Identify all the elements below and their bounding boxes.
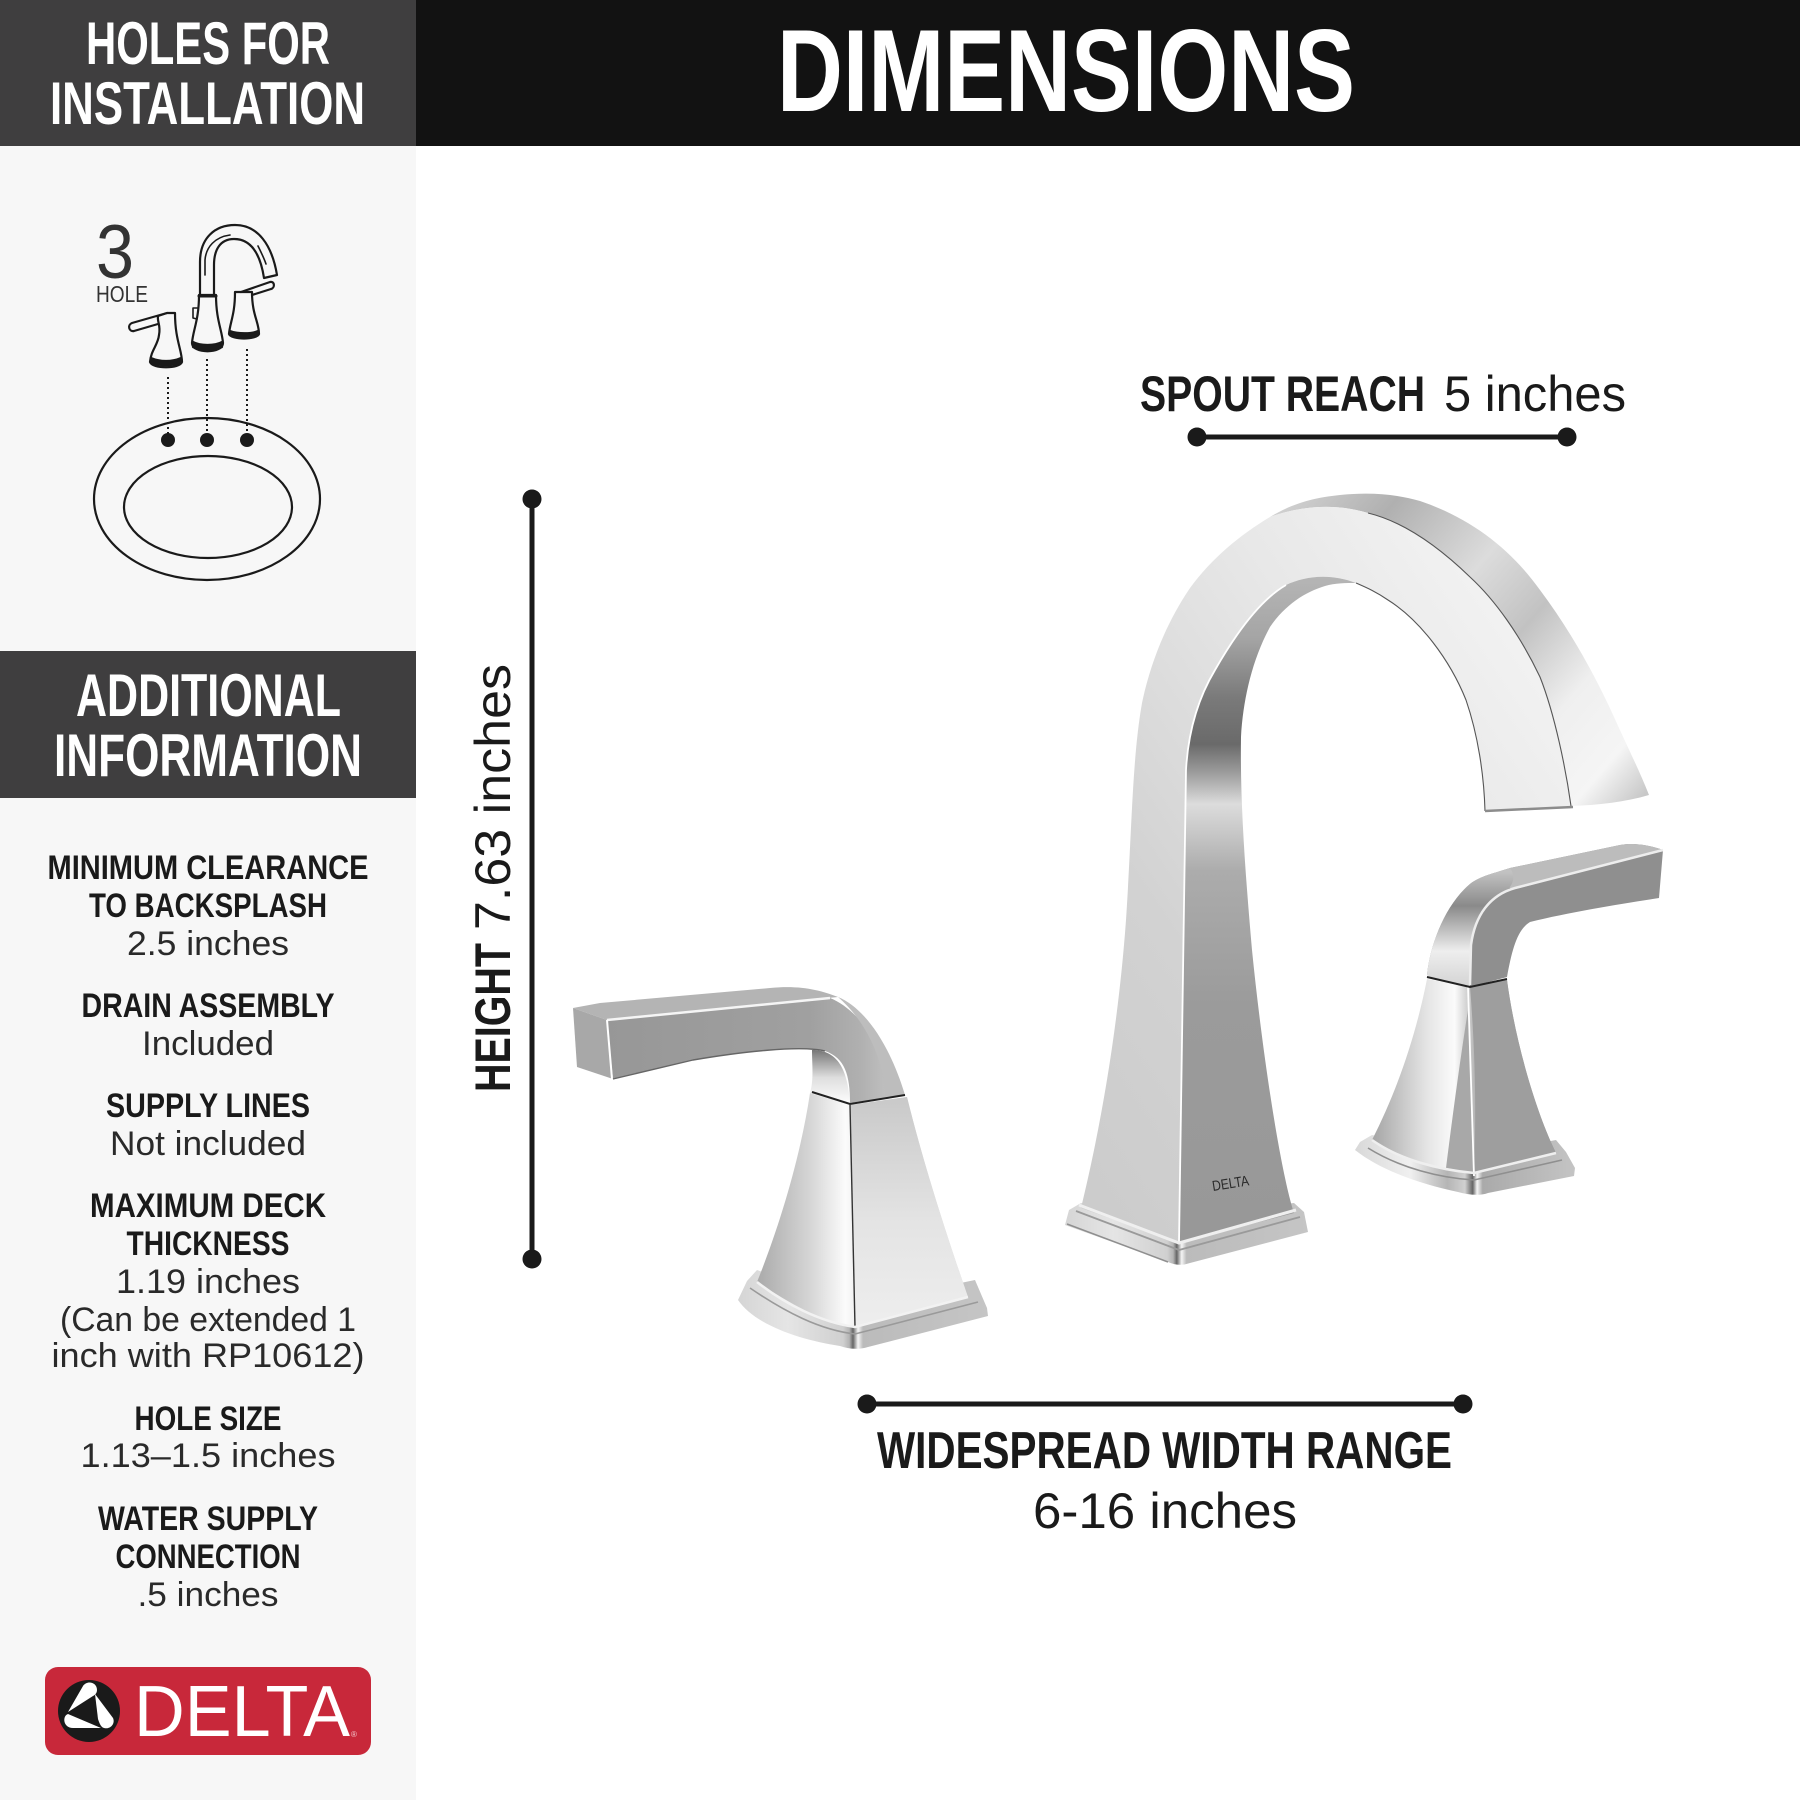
spec: maximum deck thickness: 1.19 inches xyxy=(116,1263,300,1301)
spout logo: DELTA xyxy=(1211,1173,1250,1195)
hole count label: 3 xyxy=(96,210,134,295)
spec: maximum deck thickness: THICKNESS xyxy=(126,1225,290,1263)
spout base plate xyxy=(1065,1203,1308,1265)
faucet: left handle xyxy=(573,987,988,1349)
logo: delta: ® xyxy=(351,1730,357,1739)
header: additional information: INFORMATION xyxy=(54,722,362,789)
hole count label: HOLE xyxy=(96,281,148,307)
spec: drain assembly xyxy=(82,987,335,1063)
spec: drain assembly: DRAIN ASSEMBLY xyxy=(82,987,335,1025)
dimension: widespread width range: WIDESPREAD WIDTH RANGE xyxy=(877,1422,1452,1480)
left handle neck xyxy=(810,1050,850,1105)
sink outline xyxy=(94,418,320,580)
header: additional information: ADDITIONAL xyxy=(76,662,341,729)
header: holes for installation: HOLES FOR xyxy=(86,10,330,77)
spec: supply lines xyxy=(106,1087,310,1163)
header: holes for installation: INSTALLATION xyxy=(50,70,365,137)
small right handle xyxy=(229,282,274,338)
right handle base plate xyxy=(1355,1135,1575,1195)
faucet: right handle xyxy=(1355,844,1663,1195)
dimension: height xyxy=(465,490,542,1268)
left handle body xyxy=(757,1093,968,1327)
spec: minimum clearance: 2.5 inches xyxy=(127,925,289,963)
spec: water supply connection xyxy=(98,1500,318,1614)
right handle body xyxy=(1372,979,1556,1173)
left handle lever xyxy=(607,998,905,1103)
spout front face xyxy=(1081,507,1571,1243)
mounting holes xyxy=(161,433,254,447)
spec: maximum deck thickness xyxy=(52,1187,364,1375)
spec: supply lines: Not included xyxy=(110,1125,306,1163)
spec: maximum deck thickness: (Can be extended 1 xyxy=(60,1301,356,1339)
logo: delta: DELTA xyxy=(134,1672,350,1752)
header: dimensions xyxy=(416,0,1800,146)
dimension: widespread width range: 6-16 inches xyxy=(1033,1483,1297,1539)
spec: minimum clearance: MINIMUM CLEARANCE xyxy=(48,849,368,887)
logo: delta xyxy=(45,1667,371,1755)
spec: water supply connection: CONNECTION xyxy=(116,1538,300,1576)
spout inner shaded side xyxy=(1179,577,1356,1243)
right handle lever xyxy=(1427,844,1663,987)
spout back ridge xyxy=(1270,494,1649,806)
spec: water supply connection: .5 inches xyxy=(138,1576,278,1614)
spec: maximum deck thickness: inch with RP10612) xyxy=(52,1337,364,1375)
spec: drain assembly: Included xyxy=(142,1025,274,1063)
spec: minimum clearance xyxy=(48,849,368,963)
icon: three hole faucet and sink xyxy=(94,210,320,580)
spout base highlights xyxy=(1079,1205,1296,1243)
faucet: center spout xyxy=(1065,494,1649,1265)
spec: minimum clearance: TO BACKSPLASH xyxy=(89,887,327,925)
spec: hole size: 1.13–1.5 inches xyxy=(80,1437,336,1475)
spec: hole size: HOLE SIZE xyxy=(134,1400,282,1438)
header: additional information xyxy=(0,651,416,798)
spec: maximum deck thickness: MAXIMUM DECK xyxy=(90,1187,326,1225)
left handle base plate xyxy=(738,1270,988,1349)
spec: hole size xyxy=(80,1400,336,1475)
dimension: height: 7.63 inches xyxy=(465,664,521,930)
sidebar background xyxy=(0,0,416,1800)
dotted guide lines xyxy=(168,349,247,436)
small left handle xyxy=(129,313,182,367)
dimension: spout reach: SPOUT REACH xyxy=(1140,366,1425,422)
dimension: spout reach: 5 inches xyxy=(1444,366,1626,422)
header: dimensions: DIMENSIONS xyxy=(777,5,1355,136)
dimension: height: HEIGHT xyxy=(465,943,521,1092)
dimension: widespread width range xyxy=(858,1394,1472,1539)
small faucet spout xyxy=(192,225,277,351)
spout seam xyxy=(1179,585,1286,1243)
spec: water supply connection: WATER SUPPLY xyxy=(98,1500,318,1538)
spec: supply lines: SUPPLY LINES xyxy=(106,1087,310,1125)
dimension: spout reach xyxy=(1140,366,1626,446)
header: holes for installation xyxy=(0,0,416,146)
